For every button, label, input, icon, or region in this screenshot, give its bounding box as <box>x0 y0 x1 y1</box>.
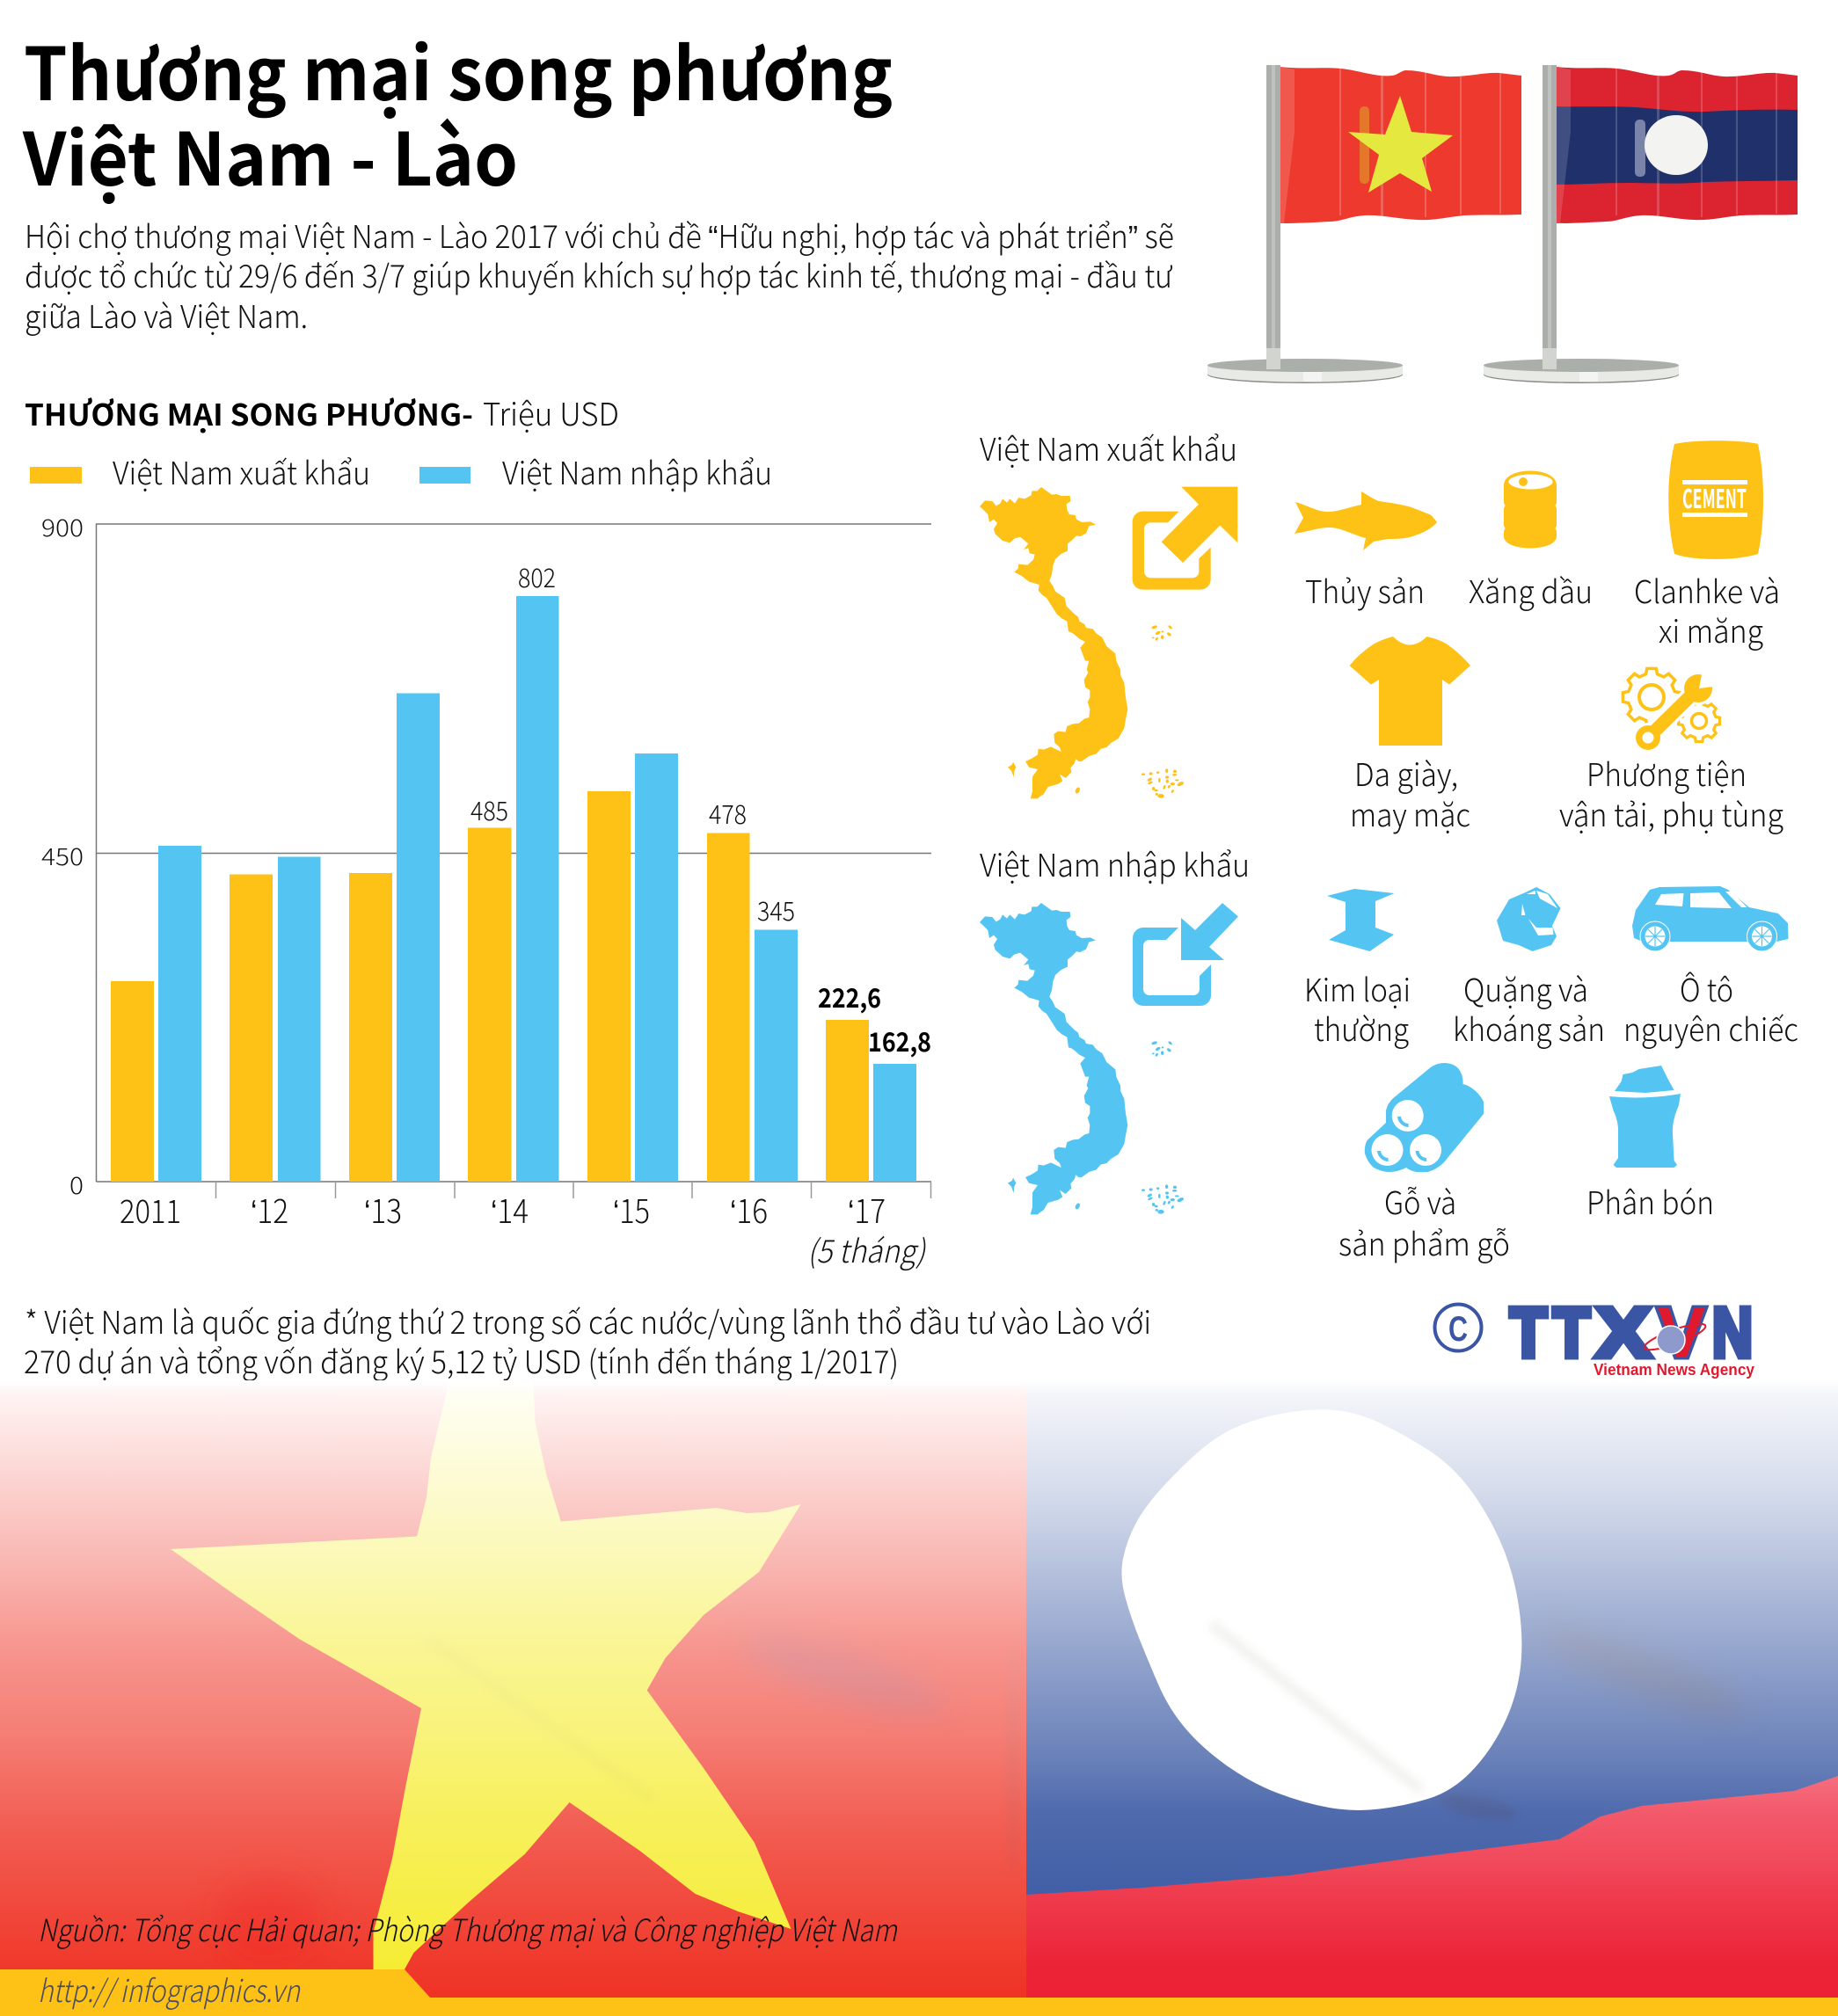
bar chart: 345 <box>757 890 795 928</box>
bar chart: ‘13 <box>364 1185 402 1233</box>
label: Phương tiện vận tải, phụ tùng: Phương tiện <box>1586 750 1747 796</box>
bar chart: 0 <box>69 1167 84 1201</box>
bar chart: ‘15 <box>613 1185 650 1233</box>
icon: cement bag <box>1668 440 1763 559</box>
label: Clanhke và xi măng <box>1634 567 1780 652</box>
map: Vietnam blue <box>980 903 1185 1214</box>
label: Quặng và khoáng sản <box>1453 965 1605 1051</box>
logo: TTXVN news agency: N <box>1712 1293 1753 1372</box>
label: Gỗ và sản phẩm gỗ: Gỗ và <box>1384 1178 1456 1224</box>
icon: export arrow <box>1133 487 1237 590</box>
label: Ô tô nguyên chiếc: Ô tô <box>1680 965 1733 1011</box>
map: Vietnam yellow <box>980 487 1185 798</box>
logo: TTXVN news agency: T <box>1510 1293 1547 1372</box>
chart heading: Triệu USD <box>483 389 619 435</box>
label: Kim loại thường: Kim loại <box>1304 965 1411 1011</box>
footer band <box>0 1969 1838 2016</box>
bar chart: 900 <box>41 509 84 543</box>
bar chart: 162,8 <box>868 1021 931 1059</box>
bar chart: 478 <box>709 793 747 832</box>
logo: TTXVN news agency: Vietnam News Agency <box>1594 1361 1754 1379</box>
bar chart: 222,6 <box>818 977 881 1015</box>
website url: http:// infographics.vn <box>38 1967 301 2012</box>
import heading: Việt Nam nhập khẩu <box>980 841 1250 886</box>
label: Kim loại thường <box>1304 965 1411 1051</box>
bar chart: 485 <box>470 790 508 828</box>
chart heading <box>25 389 619 435</box>
label: Thủy sản: Thủy sản <box>1305 567 1425 613</box>
logo: TTXVN news agency <box>1435 1293 1754 1379</box>
icon: import arrow <box>1133 903 1238 1006</box>
label: Quặng và khoáng sản: khoáng sản <box>1453 1005 1605 1051</box>
label: Da giày, may mặc: Da giày, <box>1354 750 1458 796</box>
icon: ore rock <box>1497 887 1560 951</box>
logo: TTXVN news agency: C <box>1448 1310 1468 1349</box>
icon: wood logs <box>1365 1063 1484 1172</box>
icon: gears and wrench <box>1623 668 1719 753</box>
label: Xăng dầu: Xăng dầu <box>1469 567 1593 613</box>
bar chart: ‘14 <box>491 1185 529 1233</box>
bar chart <box>41 509 931 1272</box>
label: Phương tiện vận tải, phụ tùng: vận tải, phụ tùng <box>1559 790 1783 836</box>
footnote: 270 dự án và tổng vốn đăng ký 5,12 tỷ USD (tính đến tháng 1/2017) <box>24 1337 899 1383</box>
icon: fish <box>1295 491 1437 550</box>
chart legend: Việt Nam nhập khẩu <box>502 448 772 494</box>
logo: TTXVN news agency: X <box>1596 1293 1651 1372</box>
label: Clanhke và xi măng: xi măng <box>1659 607 1763 652</box>
footnote: * Việt Nam là quốc gia đứng thứ 2 trong số các nước/vùng lãnh thổ đầu tư vào Lào với <box>25 1298 1151 1343</box>
source line: Nguồn: Tổng cục Hải quan; Phòng Thương mại và Công nghiệp Việt Nam <box>38 1906 898 1951</box>
icon: cement bag: CEMENT <box>1682 477 1747 516</box>
intro text block <box>25 212 1174 338</box>
main title: Việt Nam - Lào <box>22 101 518 207</box>
chart legend: Việt Nam xuất khẩu <box>113 448 370 494</box>
panel: Vietnam flag background <box>0 1380 1026 1998</box>
icon: car <box>1632 886 1789 951</box>
chart legend <box>30 448 772 494</box>
intro text block: được tổ chức từ 29/6 đến 3/7 giúp khuyến khích sự hợp tác kinh tế, thương mại - đầu tư <box>25 251 1173 297</box>
label: Gỗ và sản phẩm gỗ <box>1338 1178 1510 1265</box>
bar chart: (5 tháng) <box>807 1226 927 1272</box>
label: Ô tô nguyên chiếc: nguyên chiếc <box>1623 1005 1798 1051</box>
label: Phân bón: Phân bón <box>1586 1178 1714 1224</box>
label: Phương tiện vận tải, phụ tùng <box>1559 750 1783 836</box>
bar chart: ‘17 <box>848 1185 886 1233</box>
icon: oil barrel <box>1504 471 1557 549</box>
label: Kim loại thường: thường <box>1314 1005 1409 1051</box>
bar chart: ‘16 <box>730 1185 768 1233</box>
label: Ô tô nguyên chiếc <box>1623 965 1798 1051</box>
panel: Laos flag background <box>1026 1380 1838 1998</box>
main title: Thương mại song phương <box>24 16 893 121</box>
illustration: Vietnam flag on stand <box>1207 65 1521 383</box>
label: Gỗ và sản phẩm gỗ: sản phẩm gỗ <box>1338 1219 1510 1265</box>
icon: fertilizer bag <box>1609 1066 1681 1168</box>
bar chart: 802 <box>518 557 556 595</box>
label: Da giày, may mặc: may mặc <box>1350 790 1470 836</box>
intro text block: giữa Lào và Việt Nam. <box>25 292 308 338</box>
label: Da giày, may mặc <box>1350 750 1470 836</box>
logo: TTXVN news agency: T <box>1553 1293 1590 1372</box>
icon: steel beam <box>1327 889 1395 951</box>
footnote <box>24 1298 1151 1383</box>
logo: TTXVN news agency: V <box>1658 1293 1705 1372</box>
main title <box>22 16 893 207</box>
export heading: Việt Nam xuất khẩu <box>980 425 1237 470</box>
illustration: Laos flag on stand <box>1484 65 1798 383</box>
label: Quặng và khoáng sản: Quặng và <box>1463 965 1588 1011</box>
chart heading: THƯƠNG MẠI SONG PHƯƠNG- <box>25 391 473 434</box>
bar chart: 2011 <box>120 1185 181 1233</box>
icon: t-shirt <box>1349 637 1470 746</box>
intro text block: Hội chợ thương mại Việt Nam - Lào 2017 với chủ đề “Hữu nghị, hợp tác và phát triển” sẽ <box>25 212 1174 258</box>
bar chart: ‘12 <box>251 1185 288 1233</box>
label: Clanhke và xi măng: Clanhke và <box>1634 567 1780 613</box>
bar chart: 450 <box>41 838 84 872</box>
